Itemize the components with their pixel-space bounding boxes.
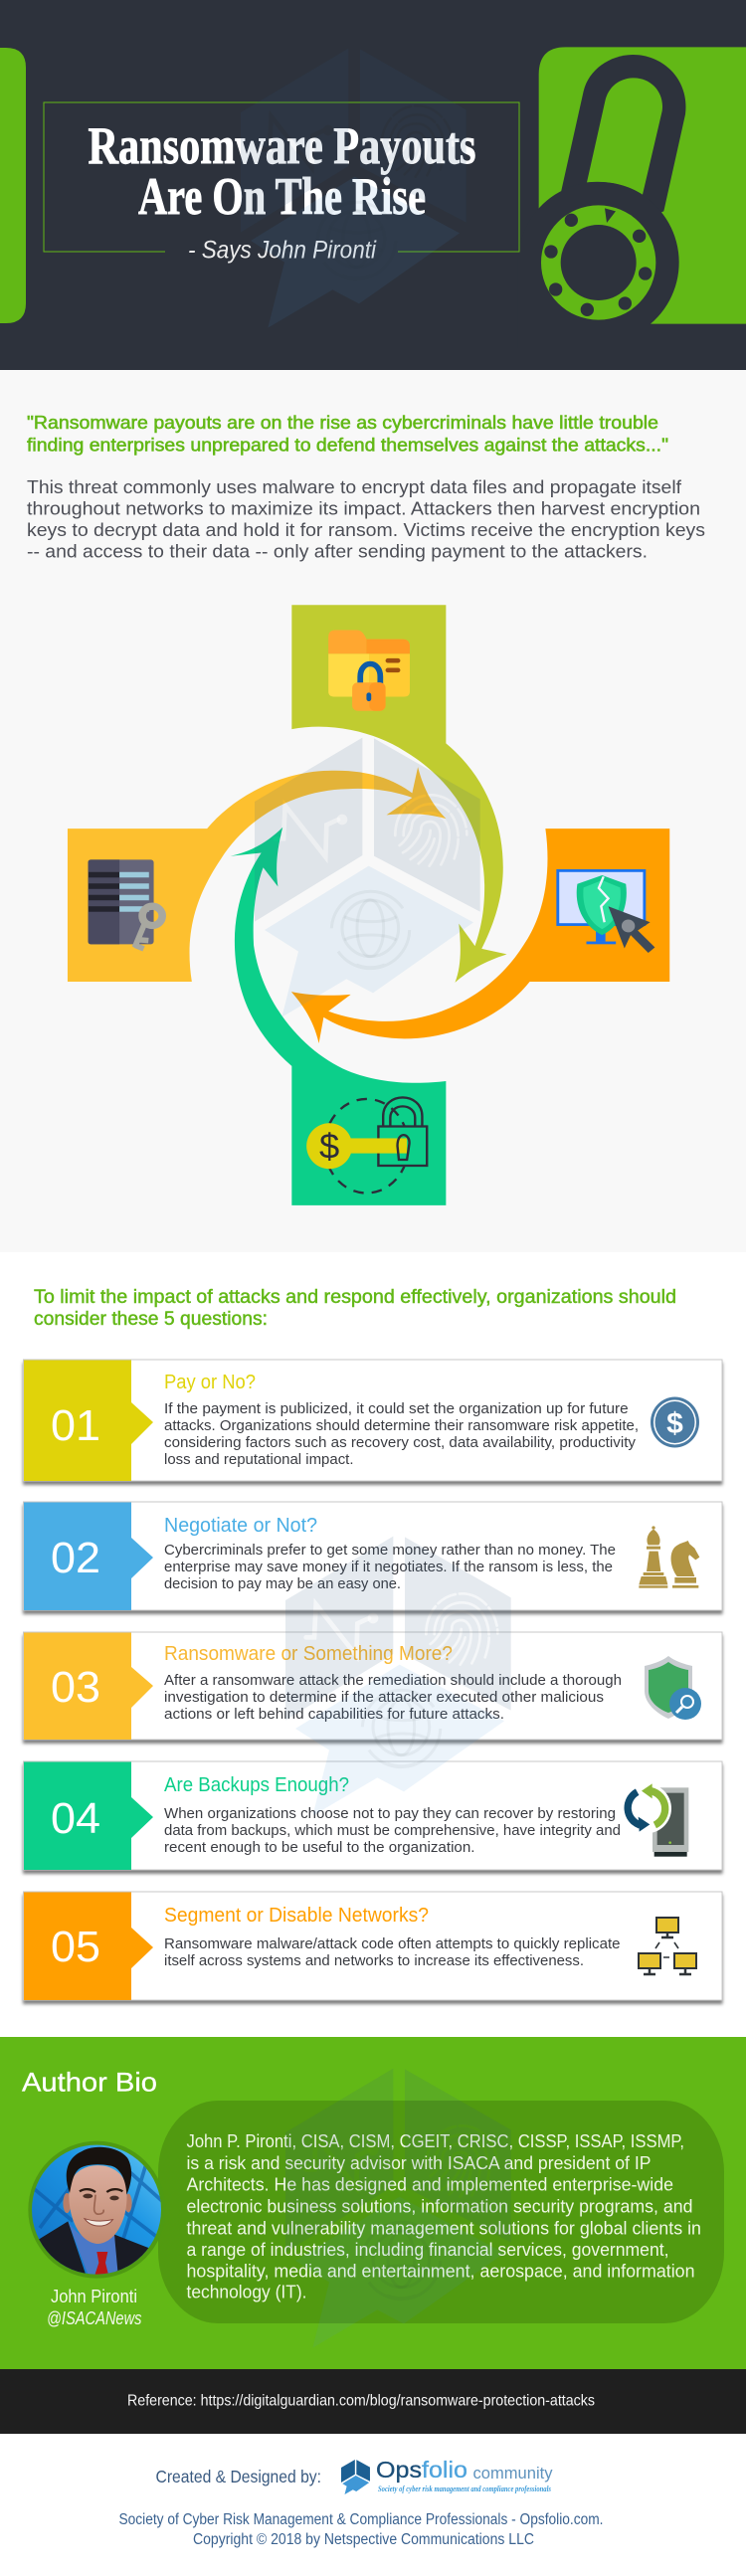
body: After a ransomware attack the remediation should include a thorough — [164, 1673, 622, 1689]
heading: Author Bio — [22, 2067, 157, 2097]
icon: chess pieces — [639, 1526, 699, 1588]
logo community: community — [473, 2464, 553, 2483]
icon: shield and magnifier — [645, 1656, 701, 1720]
card 01 — [24, 1360, 722, 1481]
section heading: five questions — [34, 1287, 676, 1330]
body — [164, 1806, 621, 1856]
intro body text: throughout networks to maximize its impact. Attackers then harvest encryption — [27, 499, 700, 519]
intro body text: keys to decrypt data and hold it for ransom. Victims receive the encryption keys — [27, 520, 705, 540]
title: Ransomware Payouts — [88, 117, 475, 175]
body: investigation to determine if the attacker executed other malicious — [164, 1690, 604, 1706]
logo wordmark: Opsfolio — [376, 2457, 467, 2483]
intro body text: This threat commonly uses malware to encrypt data files and propagate itself — [27, 477, 682, 497]
opsfolio logo — [341, 2457, 553, 2494]
subtitle: - Says John Pironti — [188, 237, 377, 265]
watermark: diagram — [255, 738, 480, 1017]
body — [164, 1936, 621, 1969]
body — [164, 1401, 639, 1468]
ransomware cycle diagram — [68, 605, 669, 1205]
intro and diagram background — [0, 370, 746, 1252]
intro quote: finding enterprises unprepared to defend themselves against the attacks..." — [27, 436, 668, 456]
footer copyright: Copyright © 2018 by Netspective Communications LLC — [193, 2531, 534, 2548]
card 05: 05 — [51, 1923, 100, 1971]
bio text: technology (IT). — [187, 2282, 306, 2301]
logo mark — [341, 2460, 370, 2494]
body: considering factors such as recovery cost, data availability, productivity — [164, 1435, 637, 1451]
heading: Ransomware or Something More? — [164, 1643, 453, 1665]
heading: Segment or Disable Networks? — [164, 1905, 429, 1927]
icon: compromised monitor — [558, 870, 654, 953]
author portrait — [28, 2141, 166, 2279]
bio text — [187, 2131, 701, 2301]
card 02: 02 — [51, 1534, 100, 1582]
card 04: 04 — [51, 1794, 100, 1843]
author handle: @ISACANews — [47, 2308, 141, 2328]
arrow panel: compromised monitor — [291, 828, 669, 1043]
arrow panel: payment — [231, 828, 446, 1205]
body: recent enough to be useful to the organization. — [164, 1840, 475, 1856]
watermark: cards — [285, 1537, 511, 1816]
card 03: 03 — [51, 1663, 100, 1712]
title frame — [44, 102, 519, 252]
body: When organizations choose not to pay they can recover by restoring — [164, 1806, 616, 1822]
left green tab — [0, 48, 26, 323]
body: itself across systems and networks to increase its effectiveness. — [164, 1953, 584, 1969]
bio text: John P. Pironti, CISA, CISM, CGEIT, CRISC, CISSP, ISSAP, ISSMP, — [187, 2131, 684, 2151]
intro body text — [27, 477, 705, 561]
icon: dollar coin: $ — [666, 1407, 683, 1440]
header band — [0, 0, 746, 370]
heading: Are Backups Enough? — [164, 1774, 349, 1796]
body: If the payment is publicized, it could set the organization up for future — [164, 1401, 629, 1417]
bio text: hospitality, media and entertainment, aerospace, and information — [187, 2262, 694, 2282]
section heading: five questions: consider these 5 questions: — [34, 1309, 268, 1330]
icon: locked folder — [328, 630, 410, 711]
body — [164, 1673, 622, 1723]
watermark: header — [241, 49, 466, 328]
body: loss and reputational impact. — [164, 1452, 354, 1468]
footer copyright: Society of Cyber Risk Management & Compliance Professionals - Opsfolio.com. — [119, 2511, 603, 2528]
body: enterprise may save money if it negotiates. If the ransom is less, the — [164, 1560, 613, 1575]
icon: ransom key and lock — [306, 1097, 427, 1194]
icon: server and key — [89, 859, 162, 949]
intro quote: "Ransomware payouts are on the rise as cybercriminals have little trouble — [27, 413, 658, 433]
bio bubble — [158, 2101, 724, 2323]
reference bar — [0, 2369, 746, 2434]
body: data from backups, which must be comprehensive, have integrity and — [164, 1823, 621, 1839]
intro quote — [27, 413, 668, 456]
body: attacks. Organizations should determine their ransomware risk appetite, — [164, 1418, 639, 1434]
bio text: Architects. He has designed and implemented enterprise-wide — [187, 2174, 673, 2194]
right green panel with padlock — [518, 47, 746, 348]
credit line: Created & Designed by: — [155, 2467, 321, 2486]
intro body text: -- and access to their data -- only after sending payment to the attackers. — [27, 541, 648, 561]
title: Are On The Rise — [138, 168, 426, 226]
body: Ransomware malware/attack code often attempts to quickly replicate — [164, 1936, 621, 1952]
card 04 — [24, 1761, 722, 1870]
icon: network of computers — [639, 1918, 696, 1974]
heading: Negotiate or Not? — [164, 1515, 317, 1537]
title — [88, 117, 475, 226]
author name: John Pironti — [51, 2287, 137, 2306]
bio text: electronic business solutions, information security programs, and — [187, 2196, 692, 2216]
bio text: is a risk and security advisor with ISACA and president of IP — [187, 2153, 651, 2173]
body: decision to pay may be an easy one. — [164, 1576, 401, 1592]
card 02 — [24, 1502, 722, 1610]
icon: ransom key and lock: $ — [319, 1127, 339, 1166]
arrow panel: encrypted folder — [291, 605, 507, 983]
watermark: bio — [285, 2069, 511, 2348]
body: actions or left behind capabilities for future attacks. — [164, 1707, 504, 1723]
footer copyright — [119, 2511, 603, 2548]
bio text: threat and vulnerability management solutions for global clients in — [187, 2218, 701, 2238]
bio text: a range of industries, including financial services, government, — [187, 2240, 668, 2260]
section heading: five questions: To limit the impact of attacks and respond effectively, organizations should — [34, 1287, 676, 1308]
card 03 — [24, 1632, 722, 1740]
reference bar: Reference: https://digitalguardian.com/blog/ransomware-protection-attacks — [127, 2393, 595, 2409]
icon: backup server with sync arrows — [622, 1783, 688, 1857]
body: Cybercriminals prefer to get some money rather than no money. The — [164, 1543, 616, 1559]
body — [164, 1543, 616, 1592]
logo tagline: Society of cyber risk management and compliance professionals — [378, 2484, 552, 2493]
card 01: 01 — [51, 1401, 100, 1450]
icon: dollar coin — [651, 1396, 699, 1448]
author bio section — [0, 2037, 746, 2369]
arrow panel: server key — [68, 767, 446, 982]
heading: Pay or No? — [164, 1372, 256, 1393]
card 05 — [24, 1892, 722, 2000]
